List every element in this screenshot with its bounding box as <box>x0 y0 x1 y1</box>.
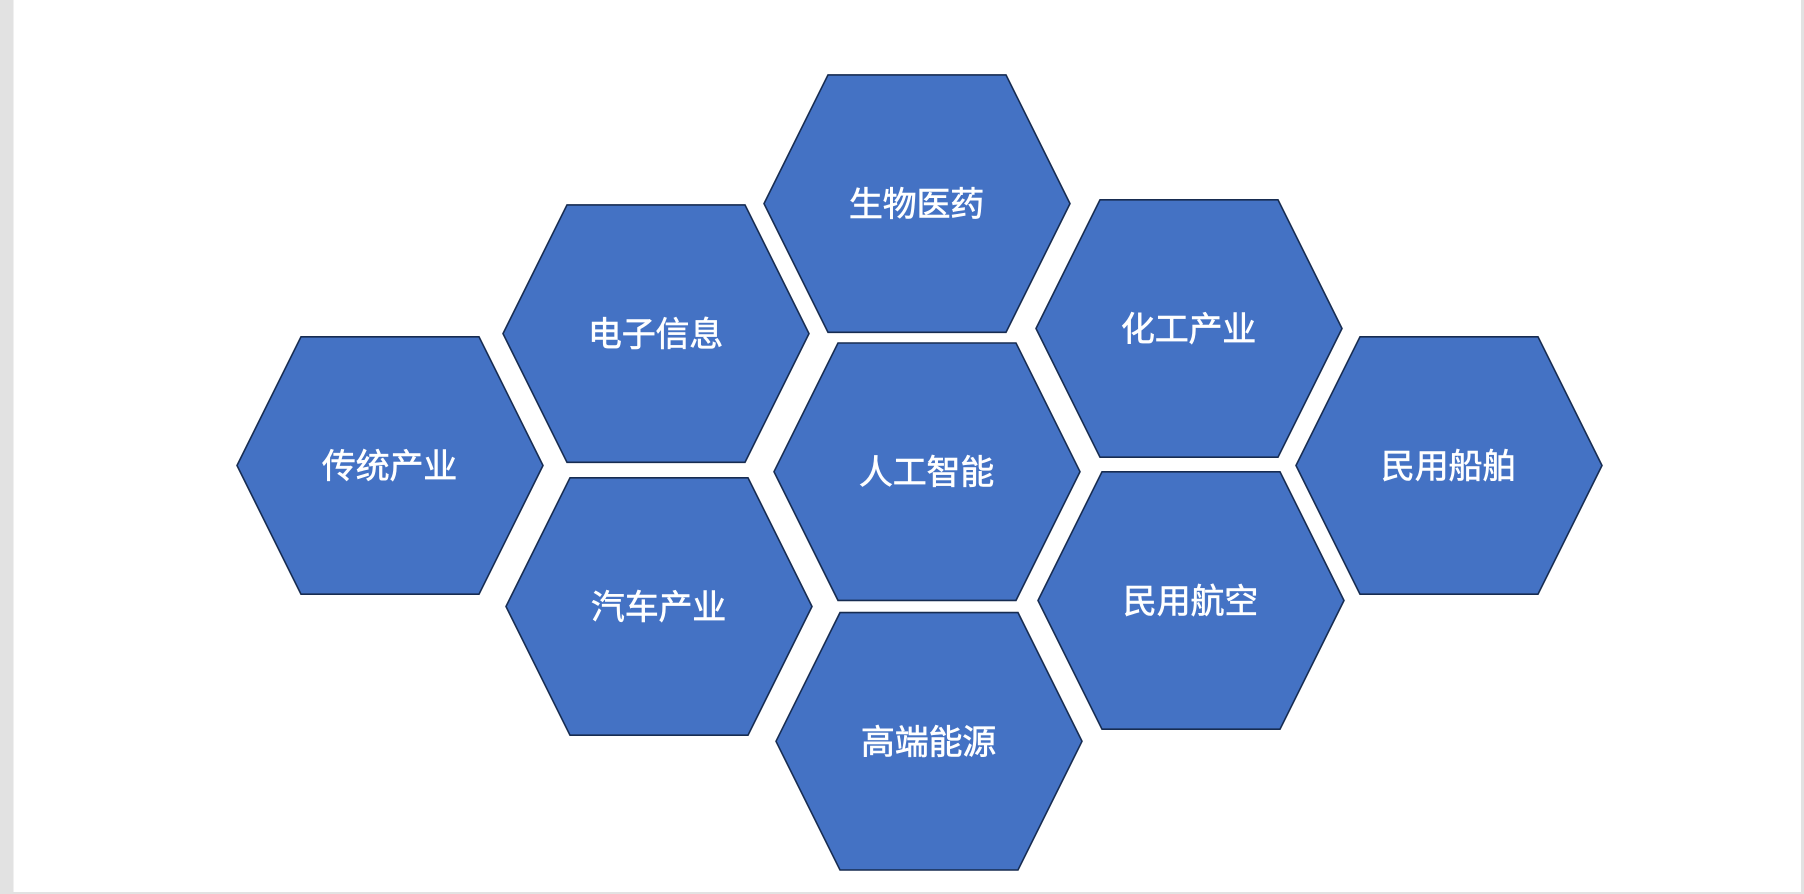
hexagon: 汽车产业: 汽车产业 <box>591 589 726 627</box>
hexagon: 生物医药 <box>764 75 1070 332</box>
hexagon: 民用航空: 民用航空 <box>1123 583 1258 621</box>
hexagon: 电子信息 <box>503 205 809 462</box>
hexagon: 化工产业 <box>1036 200 1342 457</box>
hexagon: 化工产业: 化工产业 <box>1121 311 1256 349</box>
hexagon: 汽车产业 <box>506 478 812 735</box>
hexagon: 生物医药: 生物医药 <box>849 186 984 224</box>
hexagon: 传统产业 <box>237 337 543 594</box>
hexagon: 电子信息: 电子信息 <box>588 316 723 354</box>
hexagon: 人工智能 <box>774 343 1080 600</box>
hexagon: 高端能源: 高端能源 <box>861 724 996 762</box>
hexagon: 传统产业: 传统产业 <box>322 448 457 486</box>
hexagon: 人工智能: 人工智能 <box>859 454 994 492</box>
hexagon: 民用船舶 <box>1296 337 1602 594</box>
hexagon: 高端能源 <box>776 613 1082 870</box>
hexagon: 民用航空 <box>1038 472 1344 729</box>
hexagon: 民用船舶: 民用船舶 <box>1381 448 1516 486</box>
